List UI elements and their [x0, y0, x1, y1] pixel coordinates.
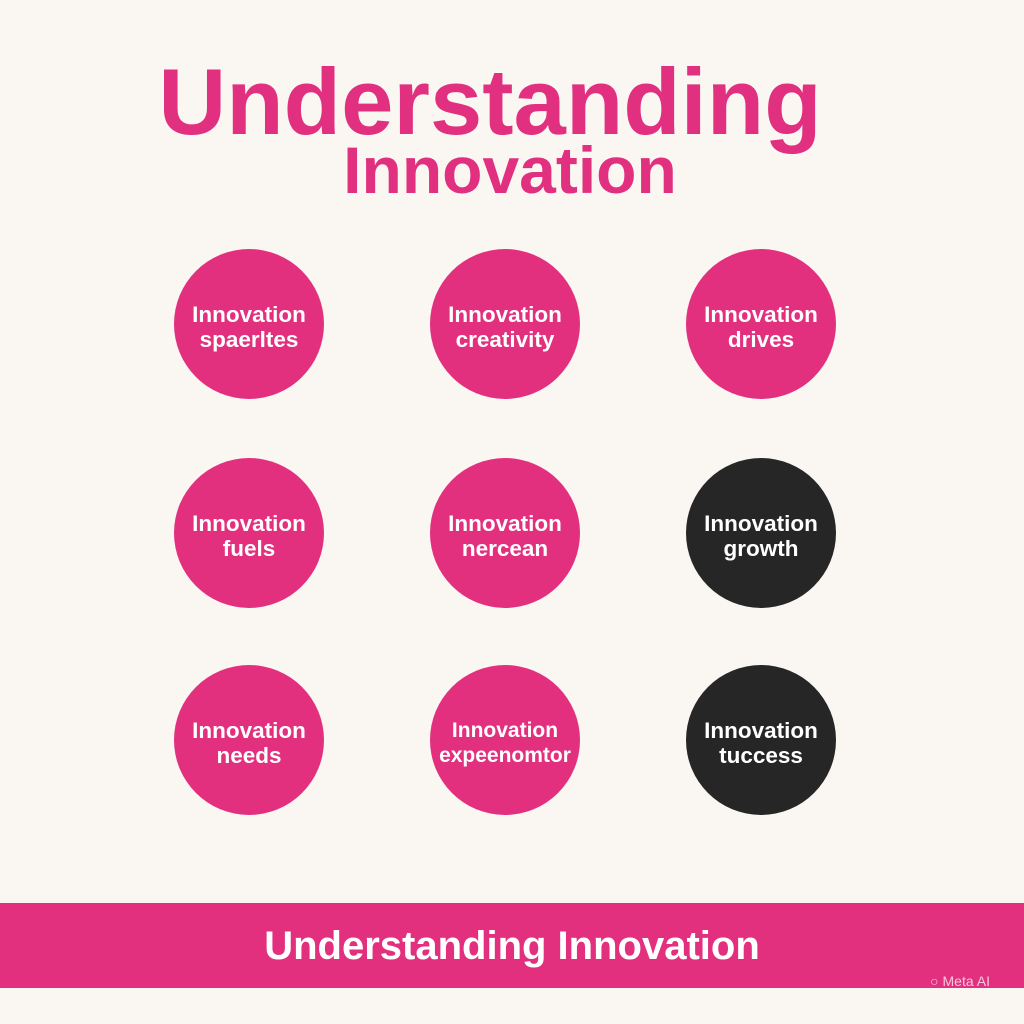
- circle: growth: growth: [724, 536, 798, 561]
- subtitle: Innovation: [343, 133, 677, 207]
- watermark: ○ Meta AI: [930, 973, 990, 989]
- circle: fuels: [174, 458, 324, 608]
- circle: creativity: [430, 249, 580, 399]
- circle: needs: [174, 665, 324, 815]
- footer banner: [0, 903, 1024, 988]
- circle: success: [686, 665, 836, 815]
- circle: success: tuccess: [719, 743, 803, 768]
- circle: success: Innovation: [704, 718, 818, 743]
- circle: fuels: fuels: [223, 536, 275, 561]
- circle: drives: Innovation: [704, 302, 818, 327]
- circle: experimentation: expeenomtor: [439, 744, 571, 767]
- circle: needs: needs: [216, 743, 282, 768]
- circle: growth: Innovation: [704, 511, 818, 536]
- title: Understanding: [158, 49, 822, 154]
- circle: fuels: Innovation: [192, 511, 306, 536]
- circle: growth: [686, 458, 836, 608]
- circle: drives: drives: [728, 327, 794, 352]
- circle: sparks: spaerltes: [200, 327, 298, 352]
- circle: creativity: creativity: [456, 327, 554, 352]
- circle: necessary: Innovation: [448, 511, 562, 536]
- banner text: Understanding Innovation: [264, 924, 760, 968]
- circle: sparks: [174, 249, 324, 399]
- circle: drives: [686, 249, 836, 399]
- circle: creativity: Innovation: [448, 302, 562, 327]
- circle: sparks: Innovation: [192, 302, 306, 327]
- circle: needs: Innovation: [192, 718, 306, 743]
- circle: experimentation: [430, 665, 580, 815]
- circle: necessary: nercean: [462, 536, 548, 561]
- circle: experimentation: Innovation: [452, 719, 558, 742]
- circle: necessary: [430, 458, 580, 608]
